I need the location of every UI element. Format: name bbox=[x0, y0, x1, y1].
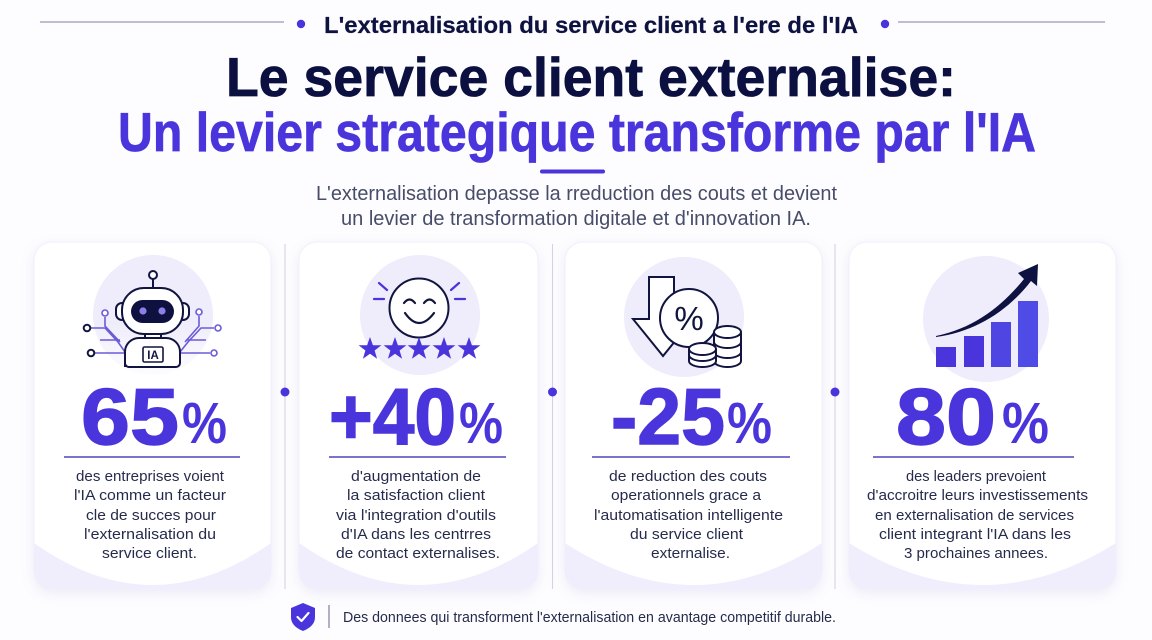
stat: 65%: % bbox=[182, 391, 227, 456]
panel: card 80% bbox=[849, 242, 1116, 589]
description: client integrant l'IA dans les bbox=[879, 526, 1071, 543]
icon: growth bars and arrow bbox=[936, 264, 1038, 367]
subtitle bbox=[316, 183, 837, 230]
description: du service client bbox=[630, 526, 744, 543]
footer note bbox=[291, 603, 836, 631]
title line 1: Le service client externalise: bbox=[226, 46, 956, 108]
description: des entreprises voient bbox=[76, 468, 225, 485]
stat: 80%: % bbox=[1002, 391, 1049, 456]
icon: robot bbox=[84, 271, 221, 367]
icon: smiley with stars bbox=[359, 278, 480, 359]
stat: +40%: +40 bbox=[329, 372, 456, 461]
icon: down arrow, percent and coins: % bbox=[674, 300, 704, 337]
description bbox=[74, 468, 226, 562]
subtitle: un levier de transformation digitale et d'innovation IA. bbox=[341, 208, 811, 230]
description bbox=[336, 468, 500, 562]
description: d'augmentation de bbox=[351, 468, 481, 485]
title underline bbox=[540, 170, 605, 174]
stat: +40%: % bbox=[459, 391, 503, 456]
panel: card 65% bbox=[34, 242, 271, 589]
description: des leaders prevoient bbox=[906, 468, 1047, 485]
description: en externalisation de services bbox=[875, 507, 1074, 524]
title line 2: Un levier strategique transforme par l'IA bbox=[118, 101, 1036, 163]
panel: card +40% bbox=[299, 242, 538, 589]
description: externalise. bbox=[651, 545, 730, 562]
description: d'accroitre leurs investissements bbox=[867, 487, 1088, 504]
footer text: Des donnees qui transforment l'externalisation en avantage competitif durable. bbox=[343, 610, 836, 626]
stat: -25%: -25 bbox=[611, 372, 725, 461]
icon: down arrow, percent and coins bbox=[633, 277, 741, 367]
description: via l'integration d'outils bbox=[336, 507, 496, 524]
description: de contact externalises. bbox=[336, 545, 500, 562]
description: l'automatisation intelligente bbox=[594, 507, 783, 524]
panel: card -25% bbox=[565, 242, 822, 589]
description: la satisfaction client bbox=[347, 487, 486, 504]
description: d'IA dans les centrres bbox=[341, 526, 491, 543]
description: operationnels grace a bbox=[611, 487, 762, 504]
stat: 65% bbox=[81, 372, 227, 461]
description: cle de succes pour bbox=[86, 507, 216, 524]
description bbox=[594, 468, 783, 562]
description: 3 prochaines annees. bbox=[904, 545, 1048, 562]
description: l'externalisation du bbox=[84, 526, 216, 543]
top banner bbox=[40, 12, 1105, 38]
description bbox=[867, 468, 1088, 562]
description: de reduction des couts bbox=[609, 468, 767, 485]
icon: robot: IA bbox=[147, 350, 159, 362]
subtitle: L'externalisation depasse la rreduction des couts et devient bbox=[316, 183, 837, 205]
stat: -25%: % bbox=[727, 391, 772, 456]
banner text: L'externalisation du service client a l'ere de l'IA bbox=[324, 12, 858, 38]
stat: 65%: 65 bbox=[81, 372, 179, 461]
icon: shield bbox=[291, 603, 315, 631]
description: l'IA comme un facteur bbox=[74, 487, 226, 504]
description: service client. bbox=[102, 545, 197, 562]
stat: 80%: 80 bbox=[896, 372, 996, 461]
connector lines between cards bbox=[280, 244, 840, 589]
stat: 80% bbox=[896, 372, 1049, 461]
